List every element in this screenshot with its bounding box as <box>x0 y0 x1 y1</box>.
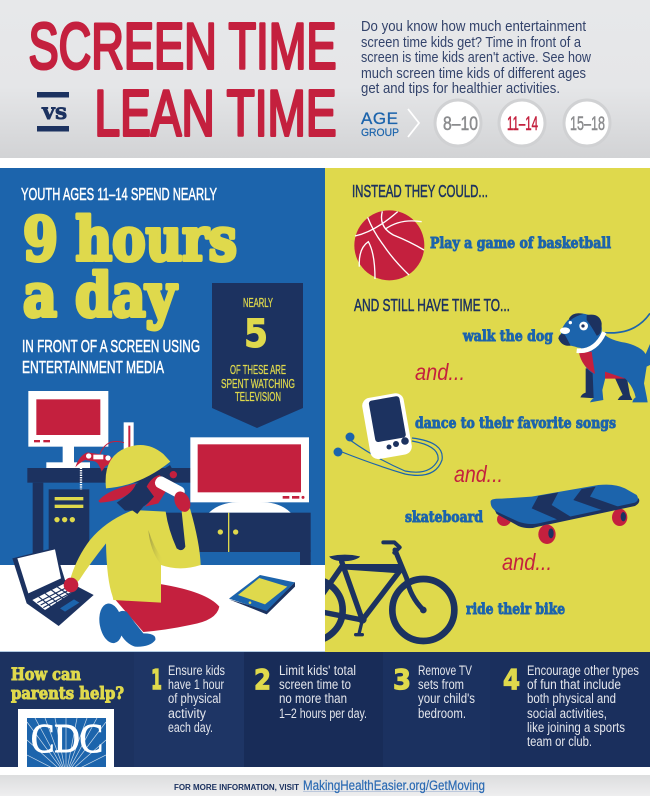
heading: how can parents help: parents help? <box>11 684 124 704</box>
icon: skateboard <box>491 485 639 544</box>
heading: and still have time to: AND STILL HAVE TIME TO... <box>354 295 510 315</box>
CDC logo: CDC <box>31 715 103 761</box>
footer: more information: MakingHealthEasier.org/GetMoving <box>303 778 485 793</box>
and divider 2: and... <box>454 461 503 487</box>
banner: nearly 5 on television <box>212 283 303 428</box>
step 4: social activities, <box>527 706 607 721</box>
age group selector: 15–18 <box>570 114 605 135</box>
follow-on text: ENTERTAINMENT MEDIA <box>22 357 164 377</box>
step 2: no more than <box>279 691 347 706</box>
illustration: kid surrounded by screens <box>0 391 325 652</box>
title: screen time vs lean time: LEAN TIME <box>94 76 336 150</box>
step 3: Remove TV <box>418 663 472 678</box>
step 1: 1 <box>151 663 162 696</box>
computer monitor <box>28 391 108 468</box>
icon: basketball <box>354 210 424 280</box>
icon: dog on a leash <box>558 313 650 402</box>
step 2: 2 <box>254 663 271 696</box>
step 3: bedroom. <box>418 706 466 721</box>
activity: ride their bike: ride their bike <box>466 600 565 618</box>
step 1: of physical <box>168 691 221 706</box>
step 4: like joining a sports <box>527 720 625 735</box>
follow-on text: IN FRONT OF A SCREEN USING <box>22 336 200 356</box>
step 1: have 1 hour <box>168 677 224 692</box>
title: screen time vs lean time: VS <box>41 104 67 123</box>
panel: how can parents help <box>0 652 650 775</box>
big stat: 9 hours a day <box>23 205 237 331</box>
step 2 <box>254 663 367 721</box>
lead-in text: YOUTH AGES 11–14 SPEND NEARLY <box>21 184 217 204</box>
follow-on text <box>22 336 200 377</box>
step 2: 1–2 hours per day. <box>279 706 367 721</box>
floor <box>0 565 325 652</box>
title: screen time vs lean time <box>28 10 336 150</box>
age group selector <box>361 100 610 146</box>
icon: bicycle <box>325 540 458 644</box>
step 2: Limit kids' total <box>279 663 356 678</box>
CDC logo <box>18 709 114 767</box>
panel: yellow right column <box>325 168 650 652</box>
intro text: much screen time kids of different ages <box>361 66 586 82</box>
tablet <box>229 575 295 614</box>
step 4: of fun that include <box>527 677 621 692</box>
banner: nearly 5 on television: 5 <box>244 312 268 357</box>
step 4: team or club. <box>527 734 592 749</box>
step 3: sets from <box>418 677 464 692</box>
device tower <box>124 422 134 452</box>
step 2: screen time to <box>279 677 351 692</box>
intro text <box>361 19 591 97</box>
step 1: activity <box>168 706 206 721</box>
footer: more information <box>0 775 650 796</box>
age group selector: 11–14 <box>507 114 538 135</box>
intro text: screen time kids get? Time in front of a <box>361 35 582 51</box>
step 3 <box>393 663 475 721</box>
heading: instead they could: INSTEAD THEY COULD... <box>352 181 488 201</box>
step 1: each day. <box>168 720 213 735</box>
title: screen time vs lean time: SCREEN TIME <box>28 10 336 82</box>
heading: how can parents help: How can <box>11 665 81 685</box>
activity: dance: dance to their favorite songs <box>415 414 616 432</box>
activity: basketball: Play a game of basketball <box>430 234 611 252</box>
kid <box>64 445 219 647</box>
activity: walk the dog: walk the dog <box>462 327 553 345</box>
step 4: 4 <box>503 663 520 696</box>
and divider 3: and... <box>502 549 552 575</box>
panel: blue left column <box>0 168 325 652</box>
big stat: 9 hours a day: 9 hours <box>23 205 237 275</box>
banner: nearly 5 on television: TELEVISION <box>235 389 281 404</box>
banner: nearly 5 on television: SPENT WATCHING <box>221 376 295 391</box>
banner: nearly 5 on television: OF THESE ARE <box>230 362 286 377</box>
step 4: both physical and <box>527 691 616 706</box>
step 3: your child's <box>418 691 475 706</box>
age group selector: AGE <box>361 109 398 128</box>
step 1 <box>151 663 225 735</box>
laptop <box>12 548 94 626</box>
footer: more information: FOR MORE INFORMATION, VISIT <box>174 783 299 792</box>
step 4 <box>503 663 639 749</box>
desk and computer tower <box>27 468 192 565</box>
icon: music player with earbuds <box>334 393 442 475</box>
age group selector: 8–10 <box>443 114 478 135</box>
television and cabinet <box>163 437 311 565</box>
game controller <box>75 441 124 472</box>
panel: header <box>0 0 650 158</box>
intro text: Do you know how much entertainment <box>361 19 586 35</box>
intro text: get and tips for healthier activities. <box>361 81 560 97</box>
big stat: 9 hours a day: a day <box>23 261 178 331</box>
step 3: 3 <box>393 663 411 696</box>
intro text: screen is time kids aren't active. See how <box>361 50 591 66</box>
step 1: Ensure kids <box>168 663 225 678</box>
and divider 1: and... <box>415 359 465 385</box>
activity: skateboard: skateboard <box>405 508 483 526</box>
age group selector: GROUP <box>361 127 399 139</box>
banner: nearly 5 on television: NEARLY <box>243 295 273 310</box>
heading: how can parents help <box>11 665 124 704</box>
